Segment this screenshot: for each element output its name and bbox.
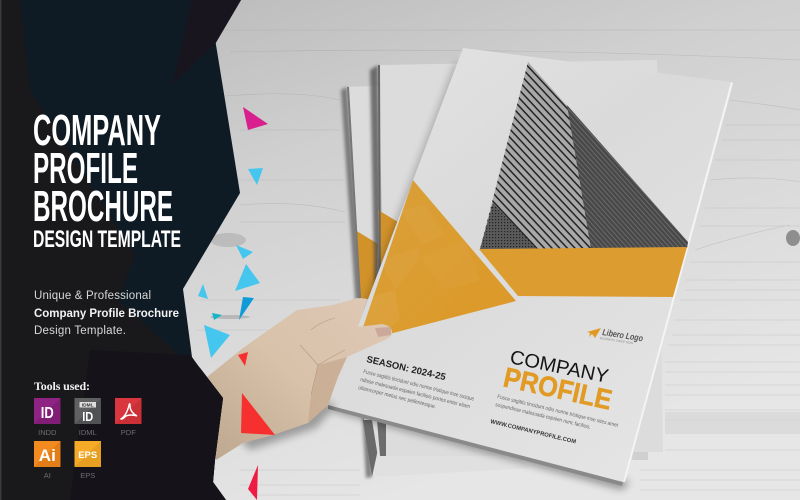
building photo	[480, 62, 688, 249]
icon: IDML	[74, 398, 101, 437]
booklet 2	[370, 60, 663, 460]
season text	[358, 354, 475, 410]
icon: EPS	[74, 441, 101, 480]
back booklets	[341, 60, 663, 478]
icon: AI: Ai	[39, 446, 56, 465]
title: BROCHURE	[33, 182, 173, 231]
company profile heading: COMPANY	[508, 346, 610, 388]
season text: SEASON: 2024-25	[365, 354, 447, 383]
cover sheet	[328, 48, 731, 482]
logo: Libero Logo	[602, 327, 644, 343]
icon: IDML: IDML	[82, 403, 94, 409]
company profile heading	[501, 346, 615, 416]
description text: Fusce sagittis tincidunt odio nonne tristique inse sites amet	[497, 394, 619, 429]
website: WWW.COMPANYPROFILE.COM	[490, 419, 577, 446]
front brochure	[328, 48, 733, 490]
logo: BUSINESS SINCE NOW	[600, 336, 634, 345]
icon: AI: AI	[44, 471, 51, 480]
decorative triangles	[198, 107, 275, 500]
season text: ullamcorper metus nec pellentesque.	[358, 385, 437, 410]
logo	[587, 327, 644, 345]
company profile heading: PROFILE	[501, 362, 615, 416]
yellow band	[479, 247, 687, 297]
icon: INDD: INDD	[38, 428, 57, 437]
icon: paper plane	[587, 328, 601, 338]
icon: AI	[34, 441, 60, 480]
description: Design Template.	[34, 325, 126, 337]
description: Company Profile Brochure	[34, 308, 179, 320]
icon: IDML: ID	[82, 410, 93, 424]
description	[34, 290, 179, 337]
yellow triangle	[358, 180, 516, 345]
description text: suspendisse malesuada espaien nunc facilisis.	[495, 402, 591, 431]
icon: EPS: EPS	[78, 450, 97, 461]
icon: PDF: PDF	[121, 428, 136, 437]
tools used heading: Tools used:	[34, 379, 90, 393]
title: COMPANY	[33, 106, 161, 155]
title: DESIGN TEMPLATE	[33, 226, 181, 253]
icon: INDD	[34, 398, 60, 437]
title: PROFILE	[33, 144, 138, 193]
dark side panel	[0, 0, 241, 500]
title	[33, 106, 181, 253]
icon: INDD: ID	[41, 405, 54, 422]
booklet 1	[341, 85, 530, 478]
description: Unique & Professional	[34, 290, 151, 302]
hand	[207, 298, 392, 460]
season text: ndisse malesuada espaien facilisis portes enter eliam	[360, 377, 471, 410]
tool icons	[34, 398, 142, 480]
season text: Fusce sagittis tincidunt odio nonne tristique inse susque	[363, 369, 475, 403]
icon: IDML: IDML	[79, 428, 97, 437]
icon: EPS: EPS	[80, 471, 95, 480]
